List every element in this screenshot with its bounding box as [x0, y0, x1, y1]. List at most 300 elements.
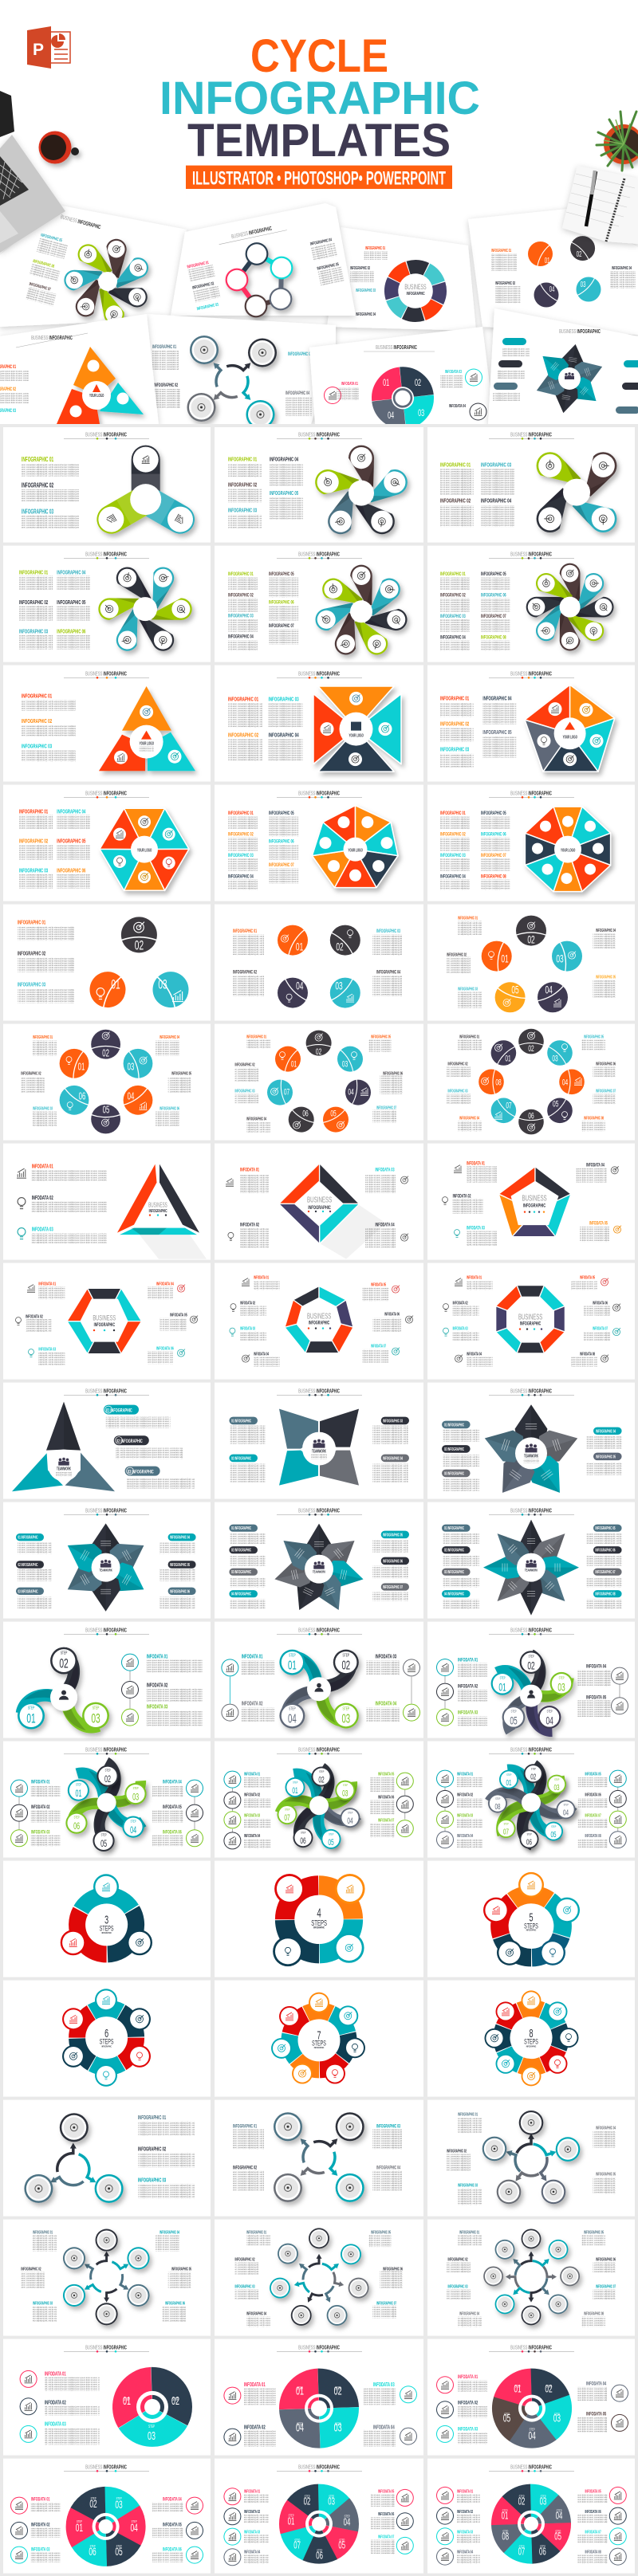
- header: [489, 791, 574, 799]
- step labels: 01: [292, 1785, 298, 1796]
- text: infodata 06: [584, 1301, 620, 1316]
- text: infodata 02: INFODATA 02: [244, 1793, 261, 1797]
- text: infographic 03: [228, 853, 258, 871]
- slide: triangle: BUSINESS INFOGRAPHIC: [31, 336, 73, 341]
- slide: four circles: INFOGRAPHIC 02: [495, 281, 516, 285]
- text: infodata 02: [16, 1314, 52, 1332]
- text: infodata 02: [223, 2507, 269, 2525]
- slide: five node ring: INFOGRAPHIC 02: [192, 281, 215, 290]
- diagram: circles: 01: [296, 942, 303, 953]
- text: infodata 04: INFODATA 04: [457, 2550, 474, 2554]
- step labels: 08: [495, 1801, 501, 1812]
- text: infodata 01: INFODATA 01: [244, 2489, 261, 2494]
- center label: 4: [317, 1906, 321, 1920]
- text: infographic 01: INFOGRAPHIC 01: [233, 2123, 257, 2130]
- header: [489, 552, 574, 560]
- header: BUSINESS INFOGRAPHIC: [85, 1628, 127, 1634]
- text: infographic 04: INFOGRAPHIC 04: [160, 1035, 180, 1039]
- text: infodata 03: INFODATA 03: [376, 1168, 395, 1173]
- slide: arrow ring: INFOGRAPHIC 01: [152, 344, 176, 350]
- text: infodata 01: [454, 1161, 497, 1183]
- slide: seven petals: INFOGRAPHIC 05: [40, 233, 63, 243]
- diagram: octagon: YOUR LOGO: [561, 848, 576, 853]
- text: infodata 02: [10, 1804, 60, 1822]
- text: infodata 01: [17, 1164, 107, 1181]
- text: infographic 02: INFOGRAPHIC 02: [18, 952, 45, 957]
- diagram: octagon ring: BUSINESS: [518, 1313, 543, 1321]
- header: [489, 433, 574, 440]
- text: infographic 05: [581, 2229, 605, 2245]
- diagram: heptagon ring: BUSINESS: [307, 1312, 332, 1321]
- pill text 02: [442, 1445, 479, 1467]
- text: infographic 02: INFOGRAPHIC 02: [138, 2146, 166, 2153]
- text: infodata 08: [578, 1831, 627, 1848]
- step labels: 01: [76, 1789, 82, 1800]
- nodes: [24, 2113, 124, 2203]
- text: infographic 01: [33, 2230, 57, 2252]
- text: infographic 02: INFOGRAPHIC 02: [22, 718, 53, 725]
- text: infographic 05: [593, 2172, 616, 2194]
- text: infographic 05: [57, 839, 90, 860]
- diagram: heptagon: [312, 806, 398, 888]
- text: infodata 05: INFODATA 05: [378, 2489, 395, 2494]
- subtitle band: ILLUSTRATOR • PHOTOSHOP• POWERPOINT: [192, 167, 446, 190]
- text: infographic 04: [156, 1035, 180, 1056]
- step labels: STEP: [529, 1655, 534, 1659]
- diagram: circles: 01: [111, 976, 120, 992]
- text: infographic 03: [234, 1089, 258, 1103]
- text: infodata 07: INFODATA 07: [378, 2534, 395, 2539]
- pill text 04: INFOGRAPHIC 04: [596, 1428, 616, 1434]
- text: infodata 03: [223, 1811, 270, 1828]
- text: infographic 03: [481, 462, 514, 495]
- text: infographic 03: [138, 2177, 195, 2198]
- text: infodata 05: INFODATA 05: [586, 2412, 606, 2417]
- text: infographic 05: INFOGRAPHIC 05: [57, 839, 86, 845]
- panel: three step pie: [3, 2339, 211, 2456]
- text: infodata 04: [152, 2497, 203, 2515]
- text: infographic 04: [593, 928, 616, 949]
- text: infographic 03: [458, 2183, 482, 2205]
- text: infographic 06: INFOGRAPHIC 06: [269, 839, 294, 845]
- text: infodata 01: [10, 2497, 60, 2515]
- pie chart: STEP: [502, 2530, 509, 2534]
- text: infographic 04: INFOGRAPHIC 04: [376, 970, 400, 976]
- pill text 03: [372, 1417, 409, 1444]
- text: infographic 06: INFOGRAPHIC 06: [383, 2266, 404, 2272]
- text: infodata 01: INFODATA 01: [32, 1164, 53, 1170]
- text: infographic 02: INFOGRAPHIC 02: [440, 832, 466, 838]
- pill text 04: [372, 1455, 409, 1482]
- center label: STEPS: [524, 2037, 538, 2046]
- slide: four circles: 03: [581, 281, 586, 289]
- step labels: STEP: [289, 1653, 296, 1658]
- text: infographic 03: INFOGRAPHIC 03: [33, 1106, 53, 1111]
- center label: STEPS: [311, 1918, 327, 1927]
- panel: eight star petals: [427, 1502, 635, 1619]
- text: infodata 02: INFODATA 02: [458, 2401, 478, 2406]
- center label: INFOGRAPHIC: [526, 2045, 536, 2048]
- diagram: circles: [60, 1030, 152, 1133]
- center label: STEPS: [100, 1924, 113, 1933]
- text: infographic 01: [440, 811, 470, 830]
- text: infographic 01: INFOGRAPHIC 01: [22, 693, 53, 700]
- diagram: hexagon ring: [67, 1288, 142, 1354]
- text: infographic 07: INFOGRAPHIC 07: [481, 614, 506, 620]
- slide: arrow ring: INFOGRAPHIC 02: [154, 383, 178, 388]
- text: infodata 05: INFODATA 05: [170, 1313, 187, 1317]
- text: infodata 03: [436, 2425, 487, 2444]
- panel: heptagon pie: [215, 785, 423, 901]
- center label: STEPS: [312, 2039, 326, 2048]
- diagram: star petals: [61, 1523, 152, 1612]
- header: BUSINESS INFOGRAPHIC: [510, 1389, 552, 1395]
- header: [277, 1389, 362, 1396]
- text: infodata 04: [577, 2381, 628, 2402]
- text: infodata 04: [366, 1702, 420, 1722]
- step labels: 02: [527, 1661, 535, 1672]
- text: infodata 07: [362, 1344, 400, 1363]
- text: infographic 08: INFOGRAPHIC 08: [584, 2311, 605, 2316]
- pie chart: STEP: [305, 2495, 310, 2499]
- pie chart: 03: [148, 2429, 156, 2443]
- pill text 04: INFOGRAPHIC 04: [383, 1455, 404, 1461]
- panel: five petal cycle: [215, 427, 423, 543]
- text: infodata 05: [152, 2522, 203, 2539]
- pie chart: STEP: [148, 2424, 155, 2429]
- text: infodata 02: INFODATA 02: [457, 2509, 474, 2514]
- header: [64, 2346, 149, 2353]
- text: infographic 05: INFOGRAPHIC 05: [596, 974, 616, 980]
- text: infographic 01: [18, 921, 74, 940]
- text: infodata 05: [362, 1282, 400, 1302]
- step labels: 03: [132, 1793, 139, 1803]
- text: infographic 04: INFOGRAPHIC 04: [596, 2126, 616, 2130]
- panel: seven petal cycle: [215, 546, 423, 662]
- text: infodata 04: INFODATA 04: [586, 1664, 606, 1670]
- text: infographic 02: INFOGRAPHIC 02: [21, 2266, 41, 2272]
- text: infodata 02: [228, 1223, 269, 1248]
- text: infographic 06: INFOGRAPHIC 06: [269, 600, 294, 606]
- header: [277, 433, 362, 440]
- text: infographic 04: [372, 2166, 402, 2190]
- text: infographic 07: [481, 853, 510, 871]
- text: infodata 05: INFODATA 05: [586, 1694, 606, 1701]
- pie chart: [503, 2381, 561, 2442]
- header: [277, 1748, 362, 1755]
- text: infodata 06: [577, 2507, 627, 2525]
- diagram: swirl: [272, 1642, 366, 1736]
- text: infodata 03: INFODATA 03: [45, 2422, 66, 2428]
- text: infographic 07: INFOGRAPHIC 07: [376, 2301, 397, 2306]
- pie chart: 08: [502, 2531, 509, 2543]
- text: infographic 07: [593, 2284, 616, 2300]
- text: infographic 07: [269, 862, 298, 884]
- text: infographic 02: [447, 1062, 471, 1078]
- diagram: star petals: TEAMWORK: [524, 1454, 538, 1459]
- slide: octagon: [327, 227, 476, 331]
- text: infographic 08: [481, 635, 510, 651]
- pill text 01: [442, 1421, 479, 1442]
- step labels: 05: [328, 1837, 334, 1848]
- text: infographic 01: INFOGRAPHIC 01: [138, 2115, 167, 2121]
- text: infographic 06: [156, 1106, 180, 1127]
- text: infographic 07: INFOGRAPHIC 07: [481, 853, 506, 859]
- step labels: STEP: [551, 1824, 557, 1828]
- pie chart: 01: [502, 2511, 508, 2522]
- text: infographic 05: [269, 811, 298, 837]
- pill text 02: [229, 1546, 266, 1566]
- text: infodata 05: INFODATA 05: [585, 1772, 601, 1777]
- text: infodata 01: [436, 2374, 487, 2393]
- pie chart: 06: [89, 2547, 96, 2558]
- text: infodata 01: INFODATA 01: [147, 1655, 168, 1660]
- text: infodata 04: [148, 1282, 185, 1299]
- step labels: STEP: [554, 1777, 560, 1781]
- pill text 03: 03 INFOGRAPHIC: [231, 1569, 251, 1574]
- slide: four circles: INFOGRAPHIC 04: [612, 265, 632, 270]
- text: infographic 01: INFOGRAPHIC 01: [459, 1035, 480, 1039]
- step labels: STEP: [76, 1783, 81, 1787]
- pill text 04: 04 INFOGRAPHIC: [444, 1592, 464, 1596]
- pill text 01: [442, 1525, 479, 1544]
- diagram: petals: [530, 446, 623, 538]
- header: BUSINESS INFOGRAPHIC: [510, 1748, 552, 1753]
- panel: four step pie: [215, 2339, 423, 2456]
- step labels: STEP: [531, 1767, 537, 1771]
- text: infodata 03: INFODATA 03: [457, 2529, 474, 2535]
- text: infodata 02: INFODATA 02: [457, 1793, 474, 1797]
- diagram: star petals: TEAMWORK: [312, 1449, 326, 1454]
- text: infographic 03: INFOGRAPHIC 03: [22, 744, 53, 750]
- panel: seven step swirl: [215, 1742, 423, 1858]
- text: infographic 04: INFOGRAPHIC 04: [228, 634, 254, 640]
- pie chart: STEP: [294, 2539, 301, 2543]
- pill text 01: 01 INFOGRAPHIC: [106, 1408, 132, 1414]
- diagram: circles: 01: [78, 1062, 85, 1073]
- panel: six petal cycle: [3, 546, 211, 662]
- pill text 08: [586, 1590, 622, 1609]
- diagram: triangle ring: INFOGRAPHIC: [149, 1208, 167, 1213]
- text: infographic 04: [270, 457, 303, 486]
- text: infographic 06: [269, 600, 298, 621]
- text: infographic 02: INFOGRAPHIC 02: [235, 1062, 255, 1067]
- center label: INFOGRAPHIC: [314, 2046, 324, 2049]
- text: infodata 01: INFODATA 01: [242, 1655, 263, 1660]
- text: infographic 01: [440, 462, 474, 495]
- pill text 05: [372, 1531, 409, 1553]
- text: infographic 02: [233, 2166, 264, 2190]
- text: infodata 06: [148, 1346, 185, 1364]
- nodes: [270, 2228, 369, 2326]
- pie chart: 04: [528, 2431, 536, 2442]
- text: infographic 04: [156, 2230, 180, 2252]
- text: infographic 02: [228, 832, 258, 851]
- slide: seven petals: INFOGRAPHIC 06: [33, 258, 55, 269]
- text: infographic 05: INFOGRAPHIC 05: [482, 730, 512, 736]
- text: infodata 04: [223, 1832, 270, 1849]
- step labels: STEP: [343, 1706, 349, 1711]
- text: infographic 01: INFOGRAPHIC 01: [233, 929, 257, 935]
- slide: pie: 04: [388, 410, 394, 422]
- pill text 03: INFOGRAPHIC 03: [383, 1418, 404, 1423]
- text: infographic 03: INFOGRAPHIC 03: [440, 614, 466, 620]
- text: infodata 04: INFODATA 04: [244, 2550, 261, 2554]
- text: infographic 02: INFOGRAPHIC 02: [228, 483, 258, 489]
- text: infodata 01: [223, 2488, 269, 2505]
- step labels: STEP: [343, 1653, 349, 1658]
- title: [160, 30, 480, 167]
- text: infodata 05: INFODATA 05: [371, 1282, 387, 1287]
- text: infographic 02: INFOGRAPHIC 02: [233, 970, 257, 976]
- diagram: circles: [482, 916, 582, 1012]
- text: infographic 05: INFOGRAPHIC 05: [371, 2229, 392, 2235]
- pie chart: STEP: [329, 2495, 335, 2499]
- slide: octagon: INFOGRAPHIC 04: [356, 312, 376, 316]
- header: BUSINESS INFOGRAPHIC: [298, 2465, 340, 2471]
- diagram: circles: 02: [316, 1046, 321, 1057]
- pill text 02: 02 INFOGRAPHIC: [116, 1439, 143, 1445]
- pill text 02: [229, 1455, 266, 1482]
- step labels: 04: [563, 1808, 569, 1817]
- step labels: 05: [100, 1839, 107, 1850]
- text: infodata 04: [365, 1223, 408, 1248]
- diagram: diamond ring: BUSINESS: [307, 1195, 333, 1204]
- text: infodata 02: INFODATA 02: [240, 1223, 259, 1228]
- text: infodata 01: INFODATA 01: [254, 1275, 270, 1280]
- text: infodata 03: [366, 1655, 420, 1676]
- step labels: STEP: [495, 1797, 501, 1800]
- list connectors: [445, 1788, 618, 1832]
- header: [489, 1628, 574, 1636]
- center label: INFOGRAPHIC: [101, 2045, 112, 2048]
- center label: STEPS: [100, 2037, 113, 2046]
- panel: four split circles: [215, 905, 423, 1021]
- text: infographic 05: INFOGRAPHIC 05: [596, 2172, 616, 2177]
- pill text 05: [586, 1525, 622, 1544]
- text: infographic 06: [380, 2266, 404, 2289]
- pie chart: 04: [296, 2421, 304, 2434]
- text: infodata 06: INFODATA 06: [585, 2509, 601, 2514]
- text: infodata 01: [221, 1655, 274, 1676]
- text: infographic 04: [57, 571, 90, 591]
- text: infographic 02: INFOGRAPHIC 02: [228, 593, 254, 599]
- text: infographic 03: [19, 630, 53, 650]
- pie chart: STEP: [554, 2413, 560, 2417]
- panel: three split circles: [3, 905, 211, 1021]
- text: infographic 04: [268, 732, 303, 761]
- panel: 5 steps ring: [427, 1861, 635, 1977]
- text: infodata 04: INFODATA 04: [163, 1780, 182, 1785]
- text: infographic 02: INFOGRAPHIC 02: [228, 832, 254, 838]
- text: infodata 04: INFODATA 04: [244, 1833, 261, 1838]
- text: infodata 04: INFODATA 04: [373, 2425, 395, 2431]
- slide: arrow ring: [147, 314, 336, 429]
- text: infographic 06: [57, 869, 90, 889]
- slide: five node ring: INFOGRAPHIC 01: [187, 260, 210, 269]
- list connectors: [232, 1789, 405, 1832]
- collage hero: [0, 0, 638, 429]
- text: infographic 02: [228, 483, 262, 503]
- text: infodata 03: [436, 1709, 487, 1726]
- pie chart: STEP: [77, 2519, 82, 2523]
- text: infodata 06: INFODATA 06: [378, 1795, 395, 1800]
- text: infographic 04: INFOGRAPHIC 04: [57, 571, 86, 576]
- center label: [524, 2027, 538, 2048]
- text: infographic 04: [57, 810, 90, 830]
- text: infodata 03: [230, 1326, 266, 1341]
- diagram: circles: 05: [103, 1105, 109, 1116]
- header: BUSINESS INFOGRAPHIC: [510, 2346, 552, 2351]
- pill text 05: [160, 1561, 196, 1581]
- slide: pie: INFODATA 03: [445, 369, 462, 374]
- text: infographic 02: INFOGRAPHIC 02: [447, 952, 467, 957]
- pie chart: STEP: [297, 2386, 303, 2391]
- text: infographic 01: [22, 693, 76, 711]
- header: [489, 1389, 574, 1396]
- diagram: pentagon ring: [498, 1167, 571, 1237]
- header: BUSINESS INFOGRAPHIC: [85, 433, 127, 438]
- diagram: star petals: TEAMWORK: [100, 1569, 112, 1573]
- header: BUSINESS INFOGRAPHIC: [298, 672, 340, 677]
- slide: pie: 03: [418, 408, 424, 419]
- header: BUSINESS INFOGRAPHIC: [510, 2465, 552, 2471]
- header: BUSINESS INFOGRAPHIC: [85, 1748, 127, 1753]
- text: infographic 05: [482, 730, 516, 758]
- icon: manager: [314, 1683, 324, 1692]
- text: infodata 08: [577, 2548, 627, 2566]
- text: infographic 03: [447, 1089, 471, 1105]
- panel: seven step pie: [215, 2459, 423, 2574]
- text: infodata 05: [370, 1772, 414, 1792]
- text: infodata 06: INFODATA 06: [593, 1301, 608, 1306]
- step labels: 06: [73, 1821, 80, 1832]
- text: infographic 04: INFOGRAPHIC 04: [440, 635, 466, 641]
- diagram: swirl: [61, 1757, 152, 1850]
- text: infographic 02: [440, 593, 470, 612]
- text: infographic 05: INFOGRAPHIC 05: [371, 1035, 392, 1039]
- header: [64, 433, 149, 440]
- pie chart: 02: [89, 2499, 97, 2511]
- text: infographic 05: INFOGRAPHIC 05: [269, 811, 294, 817]
- text: infodata 03: INFODATA 03: [457, 1813, 474, 1818]
- pill text 06: [372, 1557, 409, 1578]
- pill text 02: [16, 1561, 52, 1581]
- step labels: STEP: [504, 1822, 509, 1826]
- text: infodata 03: [29, 1347, 65, 1365]
- text: infographic 02: [22, 483, 79, 502]
- pill text 03: 03 INFOGRAPHIC: [18, 1588, 38, 1594]
- header: BUSINESS INFOGRAPHIC: [298, 791, 340, 797]
- slide: pie: BUSINESS INFOGRAPHIC: [376, 345, 417, 351]
- text: infodata 02: INFODATA 02: [147, 1683, 167, 1689]
- title: TEMPLATES: [187, 115, 451, 167]
- text: infodata 05: INFODATA 05: [580, 1275, 596, 1280]
- diagram: hexagon: [100, 808, 189, 890]
- text: infographic 02: INFOGRAPHIC 02: [19, 600, 49, 607]
- pie chart: 03: [115, 2499, 123, 2511]
- text: infographic 07: [593, 1089, 616, 1105]
- text: infographic 01: INFOGRAPHIC 01: [22, 457, 53, 463]
- text: infodata 01: INFODATA 01: [457, 2489, 474, 2494]
- text: infodata 01: INFODATA 01: [458, 1658, 478, 1663]
- text: infographic 01: INFOGRAPHIC 01: [18, 921, 46, 926]
- pie chart: STEP: [289, 2514, 294, 2518]
- slide: four circles: 01: [545, 257, 550, 265]
- text: infographic 05: INFOGRAPHIC 05: [584, 1035, 605, 1039]
- text: infographic 03: INFOGRAPHIC 03: [19, 869, 49, 874]
- text: infographic 01: INFOGRAPHIC 01: [228, 811, 254, 817]
